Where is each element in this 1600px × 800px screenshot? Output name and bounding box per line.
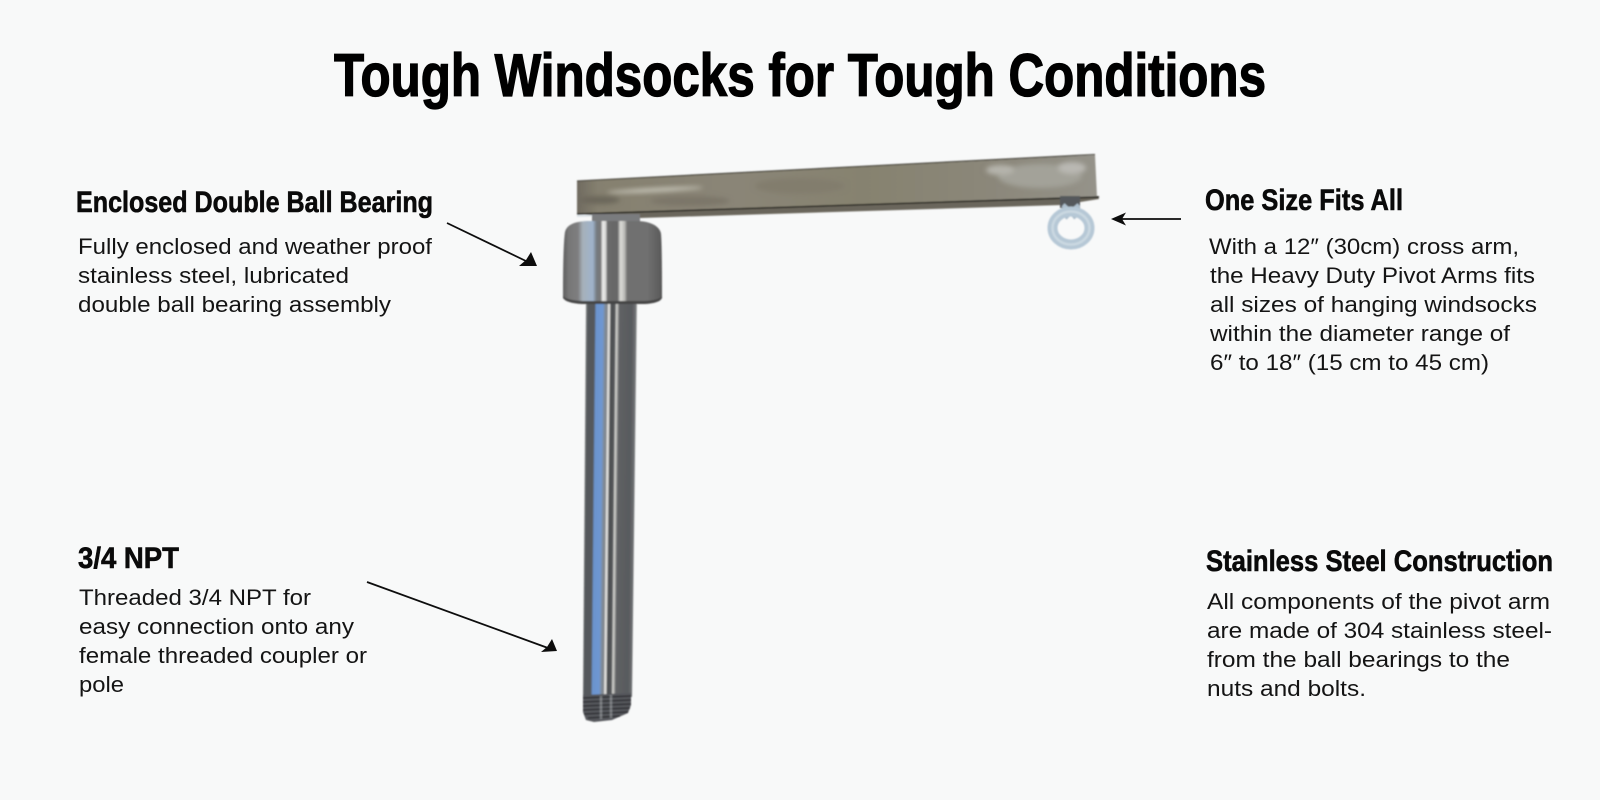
text block: NPT description: pole: [79, 672, 124, 697]
text block: stainless description: All components of the pivot arm: [1207, 589, 1550, 614]
text block: stainless description: nuts and bolts.: [1207, 676, 1366, 701]
arrow: to eye bolt: [1111, 212, 1181, 226]
heading: one size fits all: One Size Fits All: [1205, 184, 1403, 217]
text block: bearing description: double ball bearing assembly: [78, 292, 391, 317]
text block: bearing description: Fully enclosed and weather proof: [78, 234, 433, 259]
text block: NPT description: Threaded 3/4 NPT for: [79, 585, 311, 610]
callout: 3/4 NPT: [78, 542, 367, 697]
heading: 3/4 NPT: 3/4 NPT: [78, 542, 179, 575]
text block: one size description: [1209, 234, 1537, 375]
text block: stainless description: from the ball bearings to the: [1207, 647, 1510, 672]
eye bolt: [1052, 196, 1090, 244]
arrow: to bearing: [447, 223, 537, 266]
stem with threaded end: [583, 298, 637, 722]
text block: one size description: the Heavy Duty Pivot Arms fits: [1210, 263, 1535, 288]
callout: stainless steel construction: [1206, 545, 1553, 701]
text block: stainless description: [1207, 589, 1552, 701]
text block: one size description: With a 12″ (30cm) cross arm,: [1209, 234, 1519, 259]
pivot arm product image: [563, 154, 1099, 722]
text block: one size description: 6″ to 18″ (15 cm to 45 cm): [1210, 350, 1489, 375]
cross arm: [577, 154, 1099, 218]
text block: NPT description: female threaded coupler or: [79, 643, 367, 668]
text block: stainless description: are made of 304 stainless steel-: [1207, 618, 1552, 643]
text block: bearing description: stainless steel, lubricated: [78, 263, 349, 288]
bearing lower shadow: [563, 296, 662, 304]
heading: enclosed double ball bearing: Enclosed Double Ball Bearing: [76, 186, 433, 219]
bearing housing: [563, 221, 662, 303]
bearing neck: [592, 214, 640, 223]
text block: bearing description: [78, 234, 433, 317]
text block: one size description: within the diameter range of: [1209, 321, 1511, 346]
arrow: to threaded end: [367, 582, 557, 652]
text block: NPT description: [79, 585, 367, 697]
text block: NPT description: easy connection onto any: [79, 614, 354, 639]
text block: one size description: all sizes of hanging windsocks: [1210, 292, 1537, 317]
callout: enclosed double ball bearing: [76, 186, 433, 317]
callout: one size fits all: [1205, 184, 1537, 375]
title: Tough Windsocks for Tough Conditions: [334, 42, 1266, 109]
